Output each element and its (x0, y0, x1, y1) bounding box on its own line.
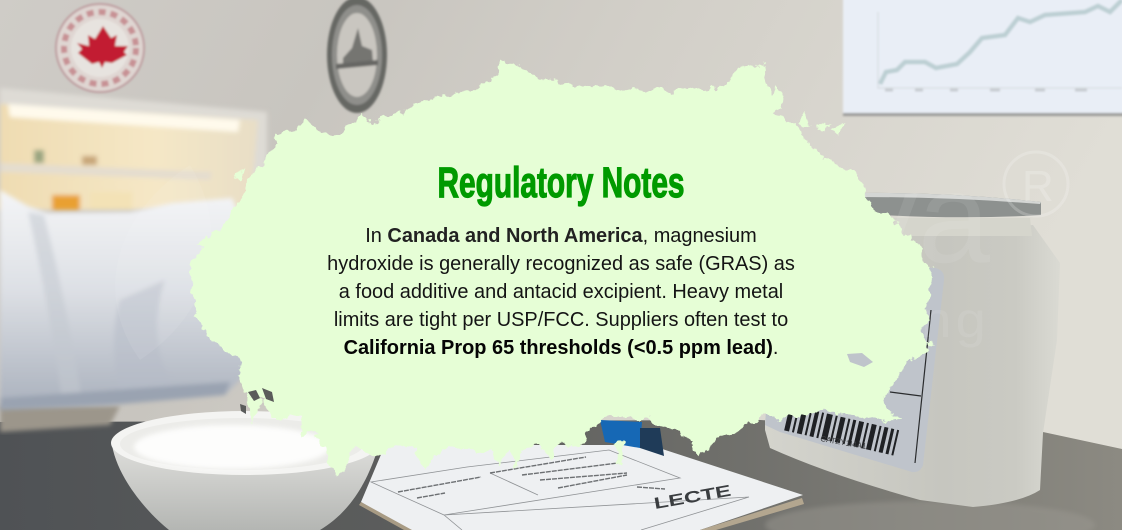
table top (0, 406, 1122, 530)
document logo: LECTE (653, 483, 733, 513)
lit wall alcove with shelf (0, 88, 267, 210)
white bowl with powder (111, 411, 379, 530)
faint watermark: Healthy Living (590, 292, 990, 348)
faint watermark: Greenleeva (320, 147, 991, 290)
jar body (765, 225, 1060, 507)
product label (765, 260, 944, 472)
title: Regulatory Notes (438, 159, 684, 207)
body text block: In Canada and North America, magnesium (365, 225, 757, 247)
faint watermark (115, 147, 991, 360)
barcode (784, 405, 899, 456)
body text block (327, 225, 795, 359)
Canadian maple leaf wall badge (56, 4, 144, 92)
powder jar (765, 193, 1060, 507)
splash speckles and gaps (240, 353, 873, 414)
wall chart with rising line (843, 0, 1122, 116)
document sheet (359, 445, 804, 530)
registered mark watermark: R (1022, 162, 1054, 211)
registered mark watermark (1004, 152, 1068, 216)
grey round wall seal (327, 0, 387, 113)
body text block: limits are tight per USP/FCC. Suppliers often test to (334, 309, 788, 331)
body text block: hydroxide is generally recognized as safe (GRAS) as (327, 253, 795, 275)
body text block: California Prop 65 thresholds (<0.5 ppm lead). (344, 337, 778, 359)
body text block: a food additive and antacid excipient. Heavy metal (339, 281, 783, 303)
white sack (0, 190, 250, 410)
jar lid (860, 193, 1041, 217)
blue object behind paper (600, 420, 664, 456)
barcode number: CATZY1I4A1 (820, 434, 868, 451)
splash-shaped note panel (190, 57, 933, 478)
